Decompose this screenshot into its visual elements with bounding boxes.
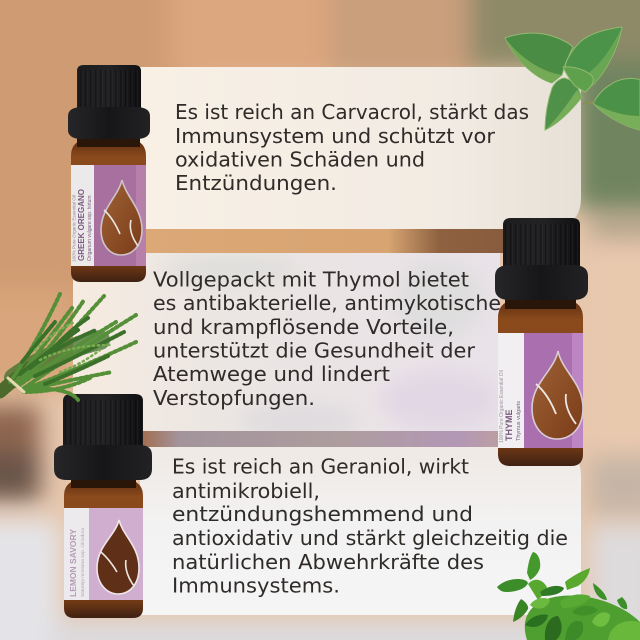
text block: Greek oregano: Es ist reich an Carvacrol, stärkt das: [175, 100, 529, 124]
text block: thyme: es antibakterielle, antimykotische: [153, 291, 501, 315]
text block: Greek oregano: Entzündungen.: [175, 171, 337, 195]
text block: thyme: Vollgepackt mit Thymol bietet: [153, 268, 469, 292]
icon: basil sprig: [497, 552, 640, 640]
text block: thyme: Atemwege und lindert: [153, 362, 390, 386]
label text: Greek oregano: 100% Pure Organic Essential Oil: [72, 195, 76, 262]
bottle: Greek oregano: [68, 65, 150, 282]
label text: lemon savory: LEMON SAVORY: [68, 529, 78, 597]
text block: lemon savory: Es ist reich an Geraniol, wirkt: [172, 454, 469, 478]
label text: lemon savory: Satureja montana ssp. citriodora: [80, 528, 86, 597]
label text: Greek oregano: GREEK OREGANO: [77, 189, 86, 261]
text block: thyme: Verstopfungen.: [153, 386, 315, 410]
text block: lemon savory: antioxidativ und stärkt gleichzeitig die: [172, 526, 568, 550]
label text: thyme: Thymus vulgaris: [516, 401, 522, 441]
icon: oregano sprig: [505, 27, 640, 130]
label text: lemon savory: [68, 528, 86, 597]
label text: Greek oregano: [72, 189, 93, 262]
text block: thyme: [153, 268, 501, 410]
label text: thyme: THYME: [504, 410, 514, 441]
bottle: thyme: [495, 218, 588, 466]
text block: lemon savory: natürlichen Abwehrkräfte des: [172, 550, 484, 574]
icon: thyme bunch: [0, 294, 136, 400]
panel: Greek oregano text card: [140, 67, 581, 229]
label text: thyme: [499, 370, 522, 443]
text block: lemon savory: [172, 454, 568, 598]
text block: Greek oregano: [175, 100, 529, 195]
label text: Greek oregano: Origanum vulgare ssp. hirtum: [87, 195, 93, 261]
text block: lemon savory: entzündungshemmend und: [172, 502, 473, 526]
text block: thyme: und krampflösende Vorteile,: [153, 315, 454, 339]
label text: thyme: 100% Pure Organic Essential Oil: [499, 370, 505, 443]
text block: Greek oregano: oxidativen Schäden und: [175, 148, 425, 172]
bottle: lemon savory: [54, 394, 152, 618]
text block: lemon savory: antimikrobiell,: [172, 479, 320, 503]
panel: thyme text card: [73, 253, 500, 436]
panel: lemon savory text card: [140, 447, 581, 615]
text block: Greek oregano: Immunsystem und schützt vor: [175, 124, 496, 148]
text block: lemon savory: Immunsystems.: [172, 574, 340, 598]
text block: thyme: unterstützt die Gesundheit der: [153, 338, 476, 362]
